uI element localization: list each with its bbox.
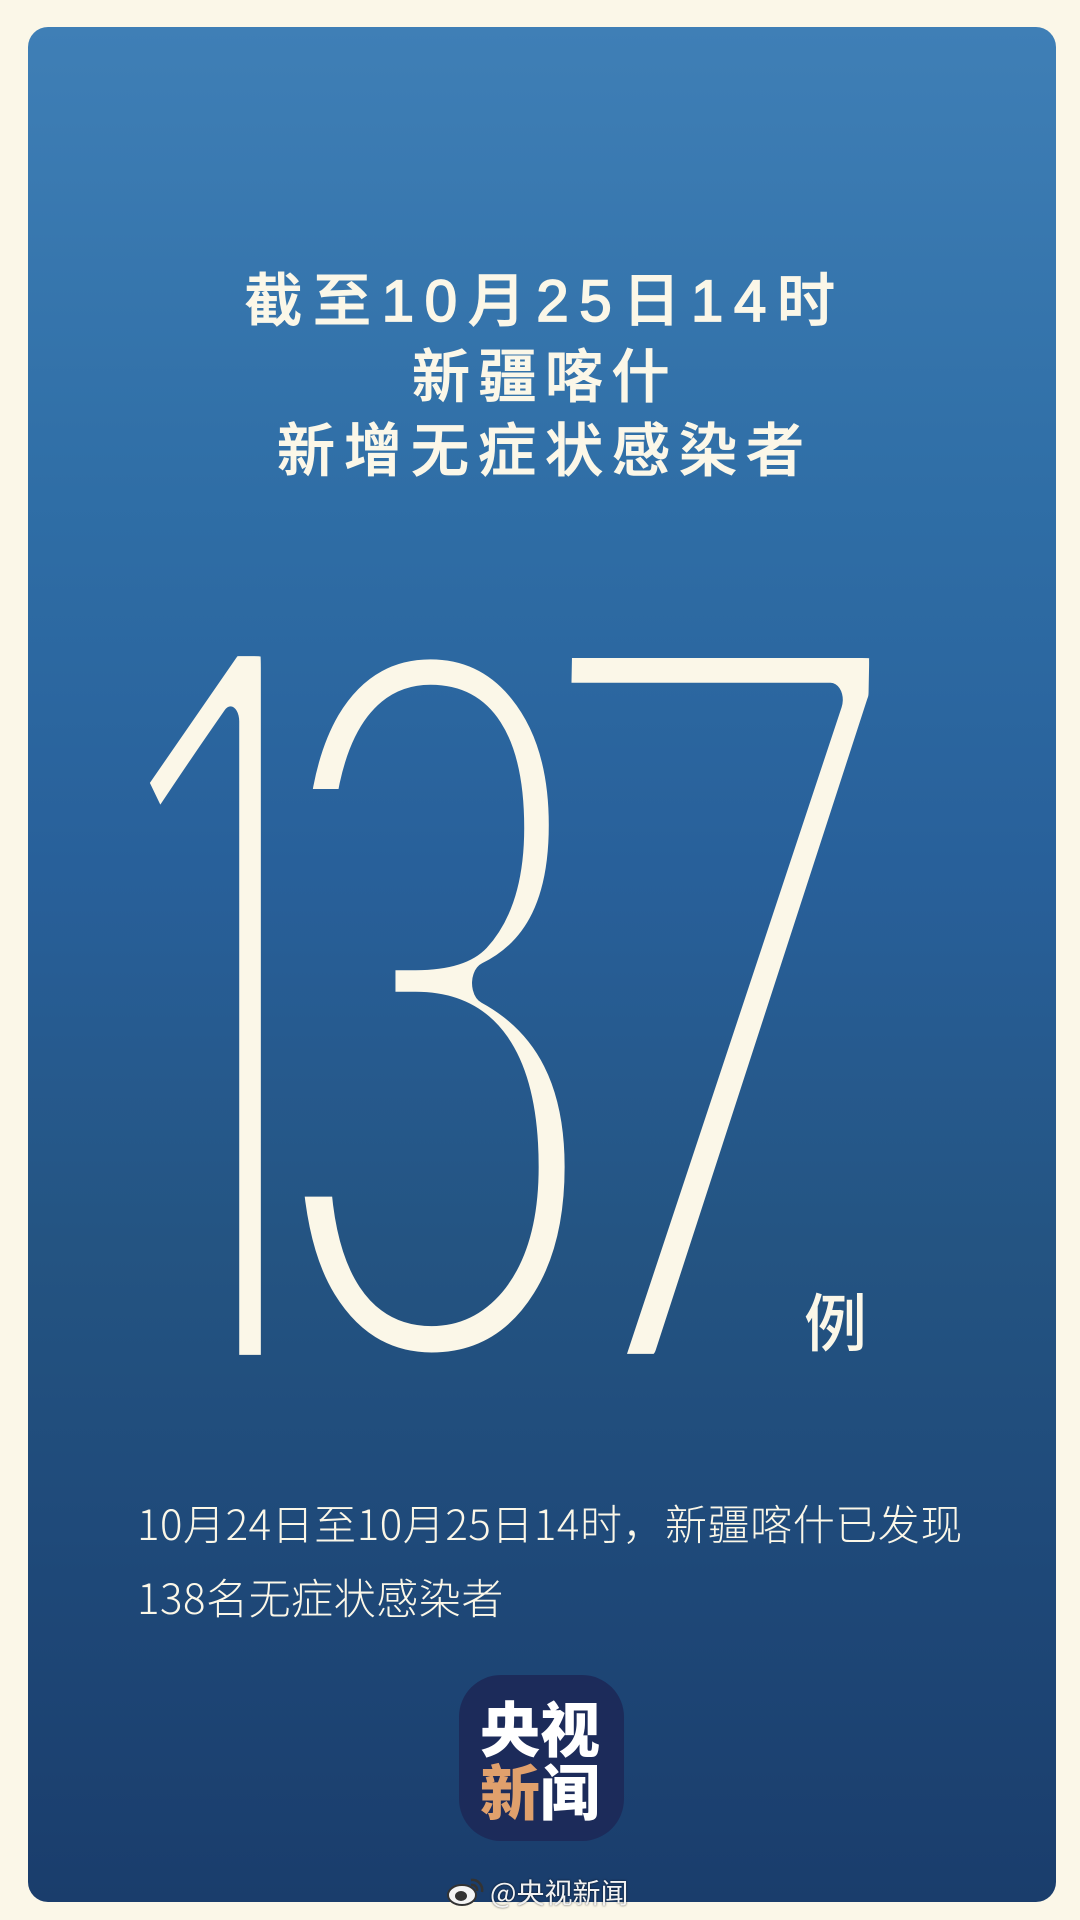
- big number 137: 7: [493, 530, 940, 1510]
- logo character: 央: [480, 1683, 540, 1770]
- heading line 3: 新增无症状感染者: [277, 419, 813, 484]
- big number 137: 3: [258, 531, 611, 1524]
- body line 1: 10月24日至10月25日14时，新疆喀什已发现: [137, 1492, 963, 1553]
- body line 2: 138名无症状感染者: [137, 1566, 504, 1627]
- heading line 1: 截至10月25日14时: [244, 269, 846, 334]
- logo character: 闻: [540, 1746, 600, 1833]
- logo: CCTV News badge: [459, 1675, 624, 1841]
- watermark: weibo handle: [447, 1872, 628, 1912]
- heading line 2: 新疆喀什: [412, 345, 678, 410]
- logo character: 新: [480, 1746, 540, 1833]
- heading: three title lines: [244, 269, 846, 484]
- unit label: 例: [804, 1274, 867, 1365]
- logo character: 视: [540, 1683, 600, 1770]
- icon: weibo logo: [447, 1878, 484, 1906]
- body text: [137, 1492, 963, 1627]
- watermark text: @央视新闻: [490, 1872, 628, 1912]
- big number 137: 1: [60, 531, 404, 1509]
